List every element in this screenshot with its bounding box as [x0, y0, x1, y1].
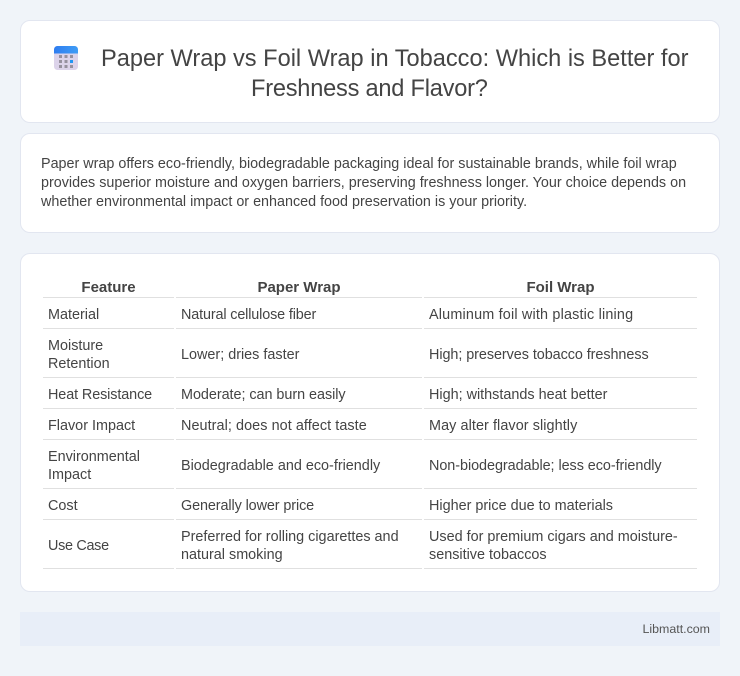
comparison table: Moderate; can burn easily [181, 387, 346, 403]
comparison table: Natural cellulose fiber [181, 307, 316, 323]
row: Environmental Impact: Environmental [48, 449, 140, 465]
title: Freshness and Flavor? [251, 76, 488, 102]
comparison table: Neutral; does not affect taste [181, 418, 367, 434]
comparison table: High; withstands heat better [429, 387, 607, 403]
comparison table: Generally lower price [181, 498, 314, 514]
title [101, 46, 688, 102]
comparison table: May alter flavor slightly [429, 418, 577, 434]
comparison table: Used for premium cigars and moisture- [429, 529, 678, 545]
comparison table: natural smoking [181, 547, 283, 563]
footer [20, 612, 720, 646]
row: Flavor Impact: Flavor Impact [48, 418, 135, 434]
panel: title card [20, 20, 720, 123]
column header: Foil Wrap: Foil Wrap [526, 279, 595, 296]
panel: summary [20, 133, 720, 233]
row: Material: Material [48, 307, 99, 323]
comparison table: Biodegradable and eco-friendly [181, 458, 380, 474]
row: Use Case: Use Case [48, 538, 109, 554]
title: Paper Wrap vs Foil Wrap in Tobacco: Which is Better for [101, 46, 688, 72]
comparison table: Aluminum foil with plastic lining [429, 307, 633, 323]
row: Moisture Retention: Moisture [48, 338, 103, 354]
comparison table: Preferred for rolling cigarettes and [181, 529, 399, 545]
row: Environmental Impact [48, 449, 140, 483]
comparison table: Higher price due to materials [429, 498, 613, 514]
row: Environmental Impact: Impact [48, 467, 91, 483]
panel: comparison table [20, 253, 720, 592]
comparison table: Non-biodegradable; less eco-friendly [429, 458, 662, 474]
row: Moisture Retention [48, 338, 110, 372]
summary text: whether environmental impact or enhanced food preservation is your priority. [41, 194, 527, 210]
row: Cost: Cost [48, 498, 78, 514]
comparison table: High; preserves tobacco freshness [429, 347, 649, 363]
icon: calendar [54, 46, 78, 70]
column header: Feature: Feature [81, 279, 136, 296]
column header: Paper Wrap: Paper Wrap [257, 279, 341, 296]
summary text [41, 156, 686, 210]
summary text: provides superior moisture and oxygen barriers, preserving freshness longer. Your choice depends on [41, 175, 686, 191]
row: Moisture Retention: Retention [48, 356, 110, 372]
comparison table: Lower; dries faster [181, 347, 299, 363]
row: Heat Resistance: Heat Resistance [48, 387, 152, 403]
footer credit: Libmatt.com [643, 622, 710, 636]
summary text: Paper wrap offers eco-friendly, biodegradable packaging ideal for sustainable brands, while foil wrap [41, 156, 677, 172]
comparison table: sensitive tobaccos [429, 547, 547, 563]
